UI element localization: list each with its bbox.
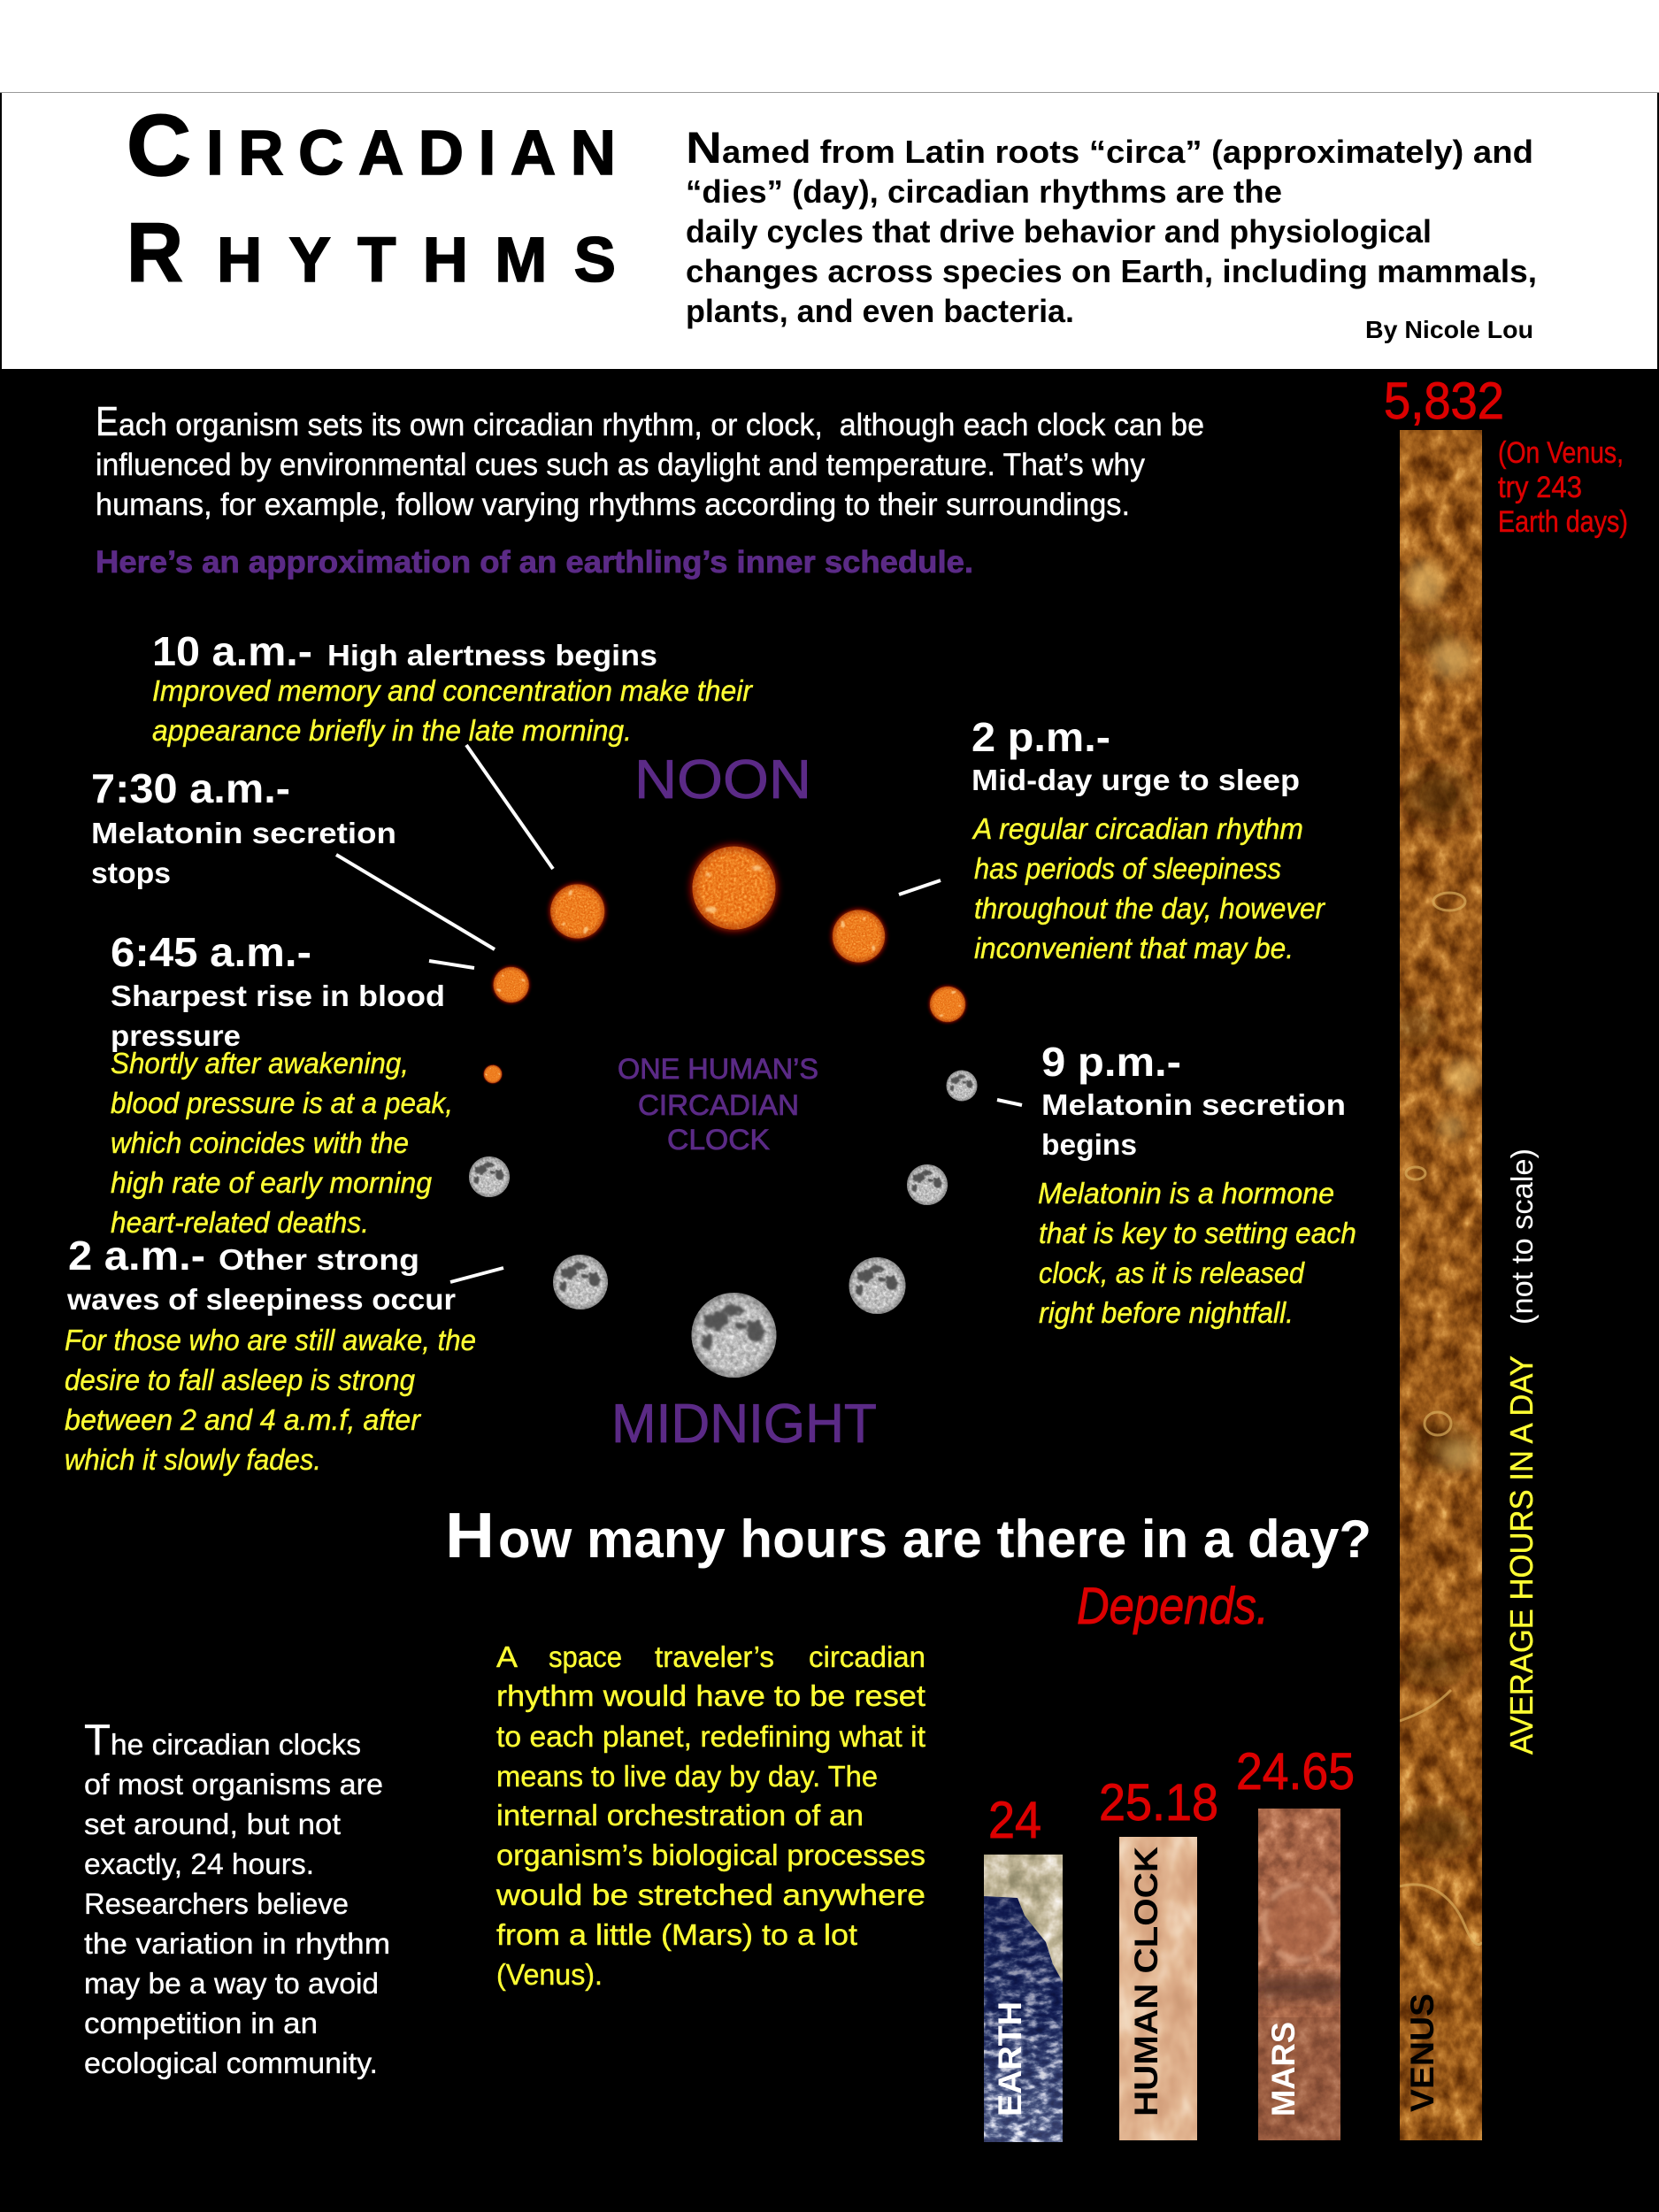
intro text block xyxy=(96,398,1204,522)
bar: venus xyxy=(1384,373,1504,2140)
callout: 6:45 a.m.: which coincides with the xyxy=(111,1126,409,1159)
callout: 6:45 a.m.: Shortly after awakening, xyxy=(111,1047,409,1079)
icon: sun late afternoon xyxy=(924,980,972,1028)
arrow: 10 a.m. xyxy=(466,745,553,869)
clock center label: ONE HUMAN’S xyxy=(618,1053,818,1085)
intro text block: humans, for example, follow varying rhythms according to their surroundings. xyxy=(96,488,1130,522)
callout: 10 a.m.: Improved memory and concentration make their xyxy=(152,674,754,707)
callout: 2 a.m.: desire to fall asleep is strong xyxy=(65,1363,416,1396)
intro paragraph: plants, and even bacteria. xyxy=(686,293,1074,329)
icon: moon before dawn xyxy=(469,1156,510,1197)
intro text block: ach organism sets its own circadian rhythm, or clock, although each clock can be xyxy=(119,408,1204,442)
text block: organisms: he circadian clocks xyxy=(111,1728,361,1761)
callout: 7:30 a.m.: 7:30 a.m.- xyxy=(91,765,290,811)
text block: space traveler: circadian xyxy=(809,1640,926,1673)
bar label: venus: VENUS xyxy=(1404,1993,1440,2112)
callout: 9 p.m.: 9 p.m.- xyxy=(1041,1039,1181,1085)
note: venus days xyxy=(1498,436,1628,539)
bar chart: hours in a day xyxy=(984,373,1504,2142)
text block: space traveler: from a little (Mars) to a lot xyxy=(496,1918,857,1951)
heading: how many hours: H xyxy=(445,1501,495,1571)
callout: 2 a.m.: 2 a.m.- xyxy=(68,1233,205,1279)
icon: sun 6:45 a.m. xyxy=(480,1061,506,1087)
title: C xyxy=(127,96,191,194)
text block: organisms: the variation in rhythm xyxy=(84,1927,390,1960)
bar: human clock xyxy=(1099,1774,1218,2140)
callout: 9 p.m.: Melatonin secretion xyxy=(1041,1088,1346,1121)
arrow: 7:30 a.m. xyxy=(336,855,495,949)
callout: 6:45 a.m.: heart-related deaths. xyxy=(111,1206,369,1239)
callout: 9 p.m.: begins xyxy=(1041,1128,1137,1161)
icon: moon late evening xyxy=(849,1257,906,1314)
callout: 6:45 a.m. xyxy=(111,929,453,1239)
title xyxy=(127,96,616,300)
callout: 2 a.m.: For those who are still awake, the xyxy=(65,1324,476,1356)
label: midnight: MIDNIGHT xyxy=(611,1394,877,1455)
callout: 6:45 a.m.: pressure xyxy=(111,1019,241,1052)
text block: space traveler: traveler’s xyxy=(655,1640,774,1673)
callout: 2 p.m. xyxy=(972,714,1326,964)
callout: 2 p.m.: throughout the day, however xyxy=(974,892,1326,925)
text block: organisms: set around, but not xyxy=(84,1808,341,1840)
intro paragraph: “dies” (day), circadian rhythms are the xyxy=(686,173,1282,210)
icon: moon 9 p.m. xyxy=(947,1071,977,1101)
callout: 2 a.m.: which it slowly fades. xyxy=(65,1443,321,1476)
callout: 2 p.m.: inconvenient that may be. xyxy=(974,932,1294,964)
clock center label: CIRCADIAN xyxy=(638,1089,799,1121)
text block: organisms: competition in an xyxy=(84,2007,318,2039)
heading: how many hours: ow many hours are there in a day? xyxy=(498,1509,1371,1569)
value: venus: 5,832 xyxy=(1384,373,1504,430)
panel: header xyxy=(0,0,1659,369)
bar label: human clock: HUMAN CLOCK xyxy=(1128,1847,1164,2116)
icon: sun 2 p.m. xyxy=(826,904,891,968)
callout: 9 p.m.: that is key to setting each xyxy=(1039,1217,1356,1249)
callout: 9 p.m.: Melatonin is a hormone xyxy=(1038,1177,1334,1210)
callout: 2 p.m.: Mid-day urge to sleep xyxy=(972,764,1300,796)
text block: space traveler: means to live day by day. The xyxy=(496,1760,878,1793)
text block: space traveler: to each planet, redefining what it xyxy=(496,1720,926,1753)
text block: space traveler: (Venus). xyxy=(496,1958,603,1991)
bar label: earth: EARTH xyxy=(992,2001,1028,2116)
text block: space traveler xyxy=(495,1640,926,1991)
icon: moon at midnight xyxy=(692,1293,777,1378)
callout: 7:30 a.m. xyxy=(91,765,396,889)
bar: mars xyxy=(1236,1743,1355,2140)
label: noon: NOON xyxy=(634,749,811,810)
arrow: 2 p.m. xyxy=(899,880,941,895)
callout: 2 a.m.: between 2 and 4 a.m.f, after xyxy=(65,1403,422,1436)
text block: space traveler: would be stretched anywhere xyxy=(495,1878,926,1911)
icon: sun 7:30 a.m. xyxy=(488,961,535,1009)
callout: 9 p.m.: clock, as it is released xyxy=(1039,1256,1306,1289)
text block: space traveler: internal orchestration of an xyxy=(496,1799,864,1832)
value: earth: 24 xyxy=(988,1792,1041,1849)
icon: moon evening xyxy=(907,1164,948,1205)
text block: organisms: T xyxy=(84,1717,111,1764)
callout: 2 a.m.: waves of sleepiness occur xyxy=(66,1283,456,1316)
title: HYTHMS xyxy=(217,226,616,296)
text block: organisms: may be a way to avoid xyxy=(84,1967,379,2000)
circadian clock diagram xyxy=(469,749,977,1455)
axis label: average hours in a day: AVERAGE HOURS IN A DAY xyxy=(1503,1356,1540,1755)
text block: space traveler: organism’s biological processes xyxy=(496,1839,926,1871)
bar: earth xyxy=(984,1792,1063,2142)
subheading: depends: Depends. xyxy=(1077,1578,1269,1635)
purple subheading: Here’s an approximation of an earthling’s inner schedule. xyxy=(96,545,973,580)
icon: sun at noon xyxy=(690,844,778,932)
note: venus days: (On Venus, xyxy=(1498,436,1624,470)
callout: 2 a.m.: Other strong xyxy=(219,1243,419,1276)
callout: 7:30 a.m.: stops xyxy=(91,856,171,889)
callout: 10 a.m.: 10 a.m.- xyxy=(152,628,312,674)
callout: 10 a.m.: High alertness begins xyxy=(327,639,657,672)
arrow: 6:45 a.m. xyxy=(429,961,474,968)
intro paragraph: daily cycles that drive behavior and physiological xyxy=(686,213,1432,250)
clock center label xyxy=(618,1053,818,1156)
icon: sun 10 a.m. xyxy=(541,875,614,948)
note: venus days: try 243 xyxy=(1498,471,1582,504)
callout: 6:45 a.m.: 6:45 a.m.- xyxy=(111,929,311,975)
intro text block: E xyxy=(96,398,119,444)
callout: 2 a.m. xyxy=(65,1233,476,1476)
callout: 9 p.m. xyxy=(1038,1039,1356,1329)
callout: 9 p.m.: right before nightfall. xyxy=(1039,1296,1294,1329)
axis note: not to scale: (not to scale) xyxy=(1506,1148,1540,1325)
callout: 2 p.m.: has periods of sleepiness xyxy=(974,852,1281,885)
intro paragraph xyxy=(686,123,1537,329)
text block: organisms: exactly, 24 hours. xyxy=(84,1847,314,1880)
callout: 6:45 a.m.: blood pressure is at a peak, xyxy=(111,1087,453,1119)
value: mars: 24.65 xyxy=(1236,1743,1355,1801)
text block: space traveler: rhythm would have to be reset xyxy=(496,1679,926,1712)
callout: 6:45 a.m.: Sharpest rise in blood xyxy=(111,979,445,1012)
text block: space traveler: A xyxy=(496,1640,518,1673)
note: venus days: Earth days) xyxy=(1498,505,1628,539)
text block: organisms: ecological community. xyxy=(84,2047,378,2079)
text block: organisms xyxy=(84,1717,390,2079)
bar label: mars: MARS xyxy=(1265,2022,1302,2116)
intro text block: influenced by environmental cues such as daylight and temperature. That’s why xyxy=(96,448,1145,482)
value: human clock: 25.18 xyxy=(1099,1774,1218,1832)
callout: 2 p.m.: 2 p.m.- xyxy=(972,714,1110,760)
text block: space traveler: space xyxy=(549,1640,622,1673)
icon: moon 2 a.m. xyxy=(553,1255,608,1310)
title: R xyxy=(127,206,183,300)
callout: 10 a.m.: appearance briefly in the late morning. xyxy=(152,714,632,747)
text block: organisms: of most organisms are xyxy=(84,1768,383,1801)
arrow: 2 a.m. xyxy=(450,1268,503,1282)
arrow: 9 p.m. xyxy=(997,1100,1022,1105)
title: IRCADIAN xyxy=(206,119,616,188)
intro paragraph: N xyxy=(686,123,722,173)
callout: 6:45 a.m.: high rate of early morning xyxy=(111,1166,433,1199)
clock center label: CLOCK xyxy=(667,1124,770,1156)
callout: 7:30 a.m.: Melatonin secretion xyxy=(91,817,396,849)
intro paragraph: amed from Latin roots “circa” (approximately) and xyxy=(722,134,1533,170)
text block: organisms: Researchers believe xyxy=(84,1887,349,1920)
callout: 2 p.m.: A regular circadian rhythm xyxy=(972,812,1303,845)
intro paragraph: changes across species on Earth, including mammals, xyxy=(686,253,1537,289)
byline: By Nicole Lou xyxy=(1365,316,1533,343)
callout: 10 a.m. xyxy=(152,628,754,747)
